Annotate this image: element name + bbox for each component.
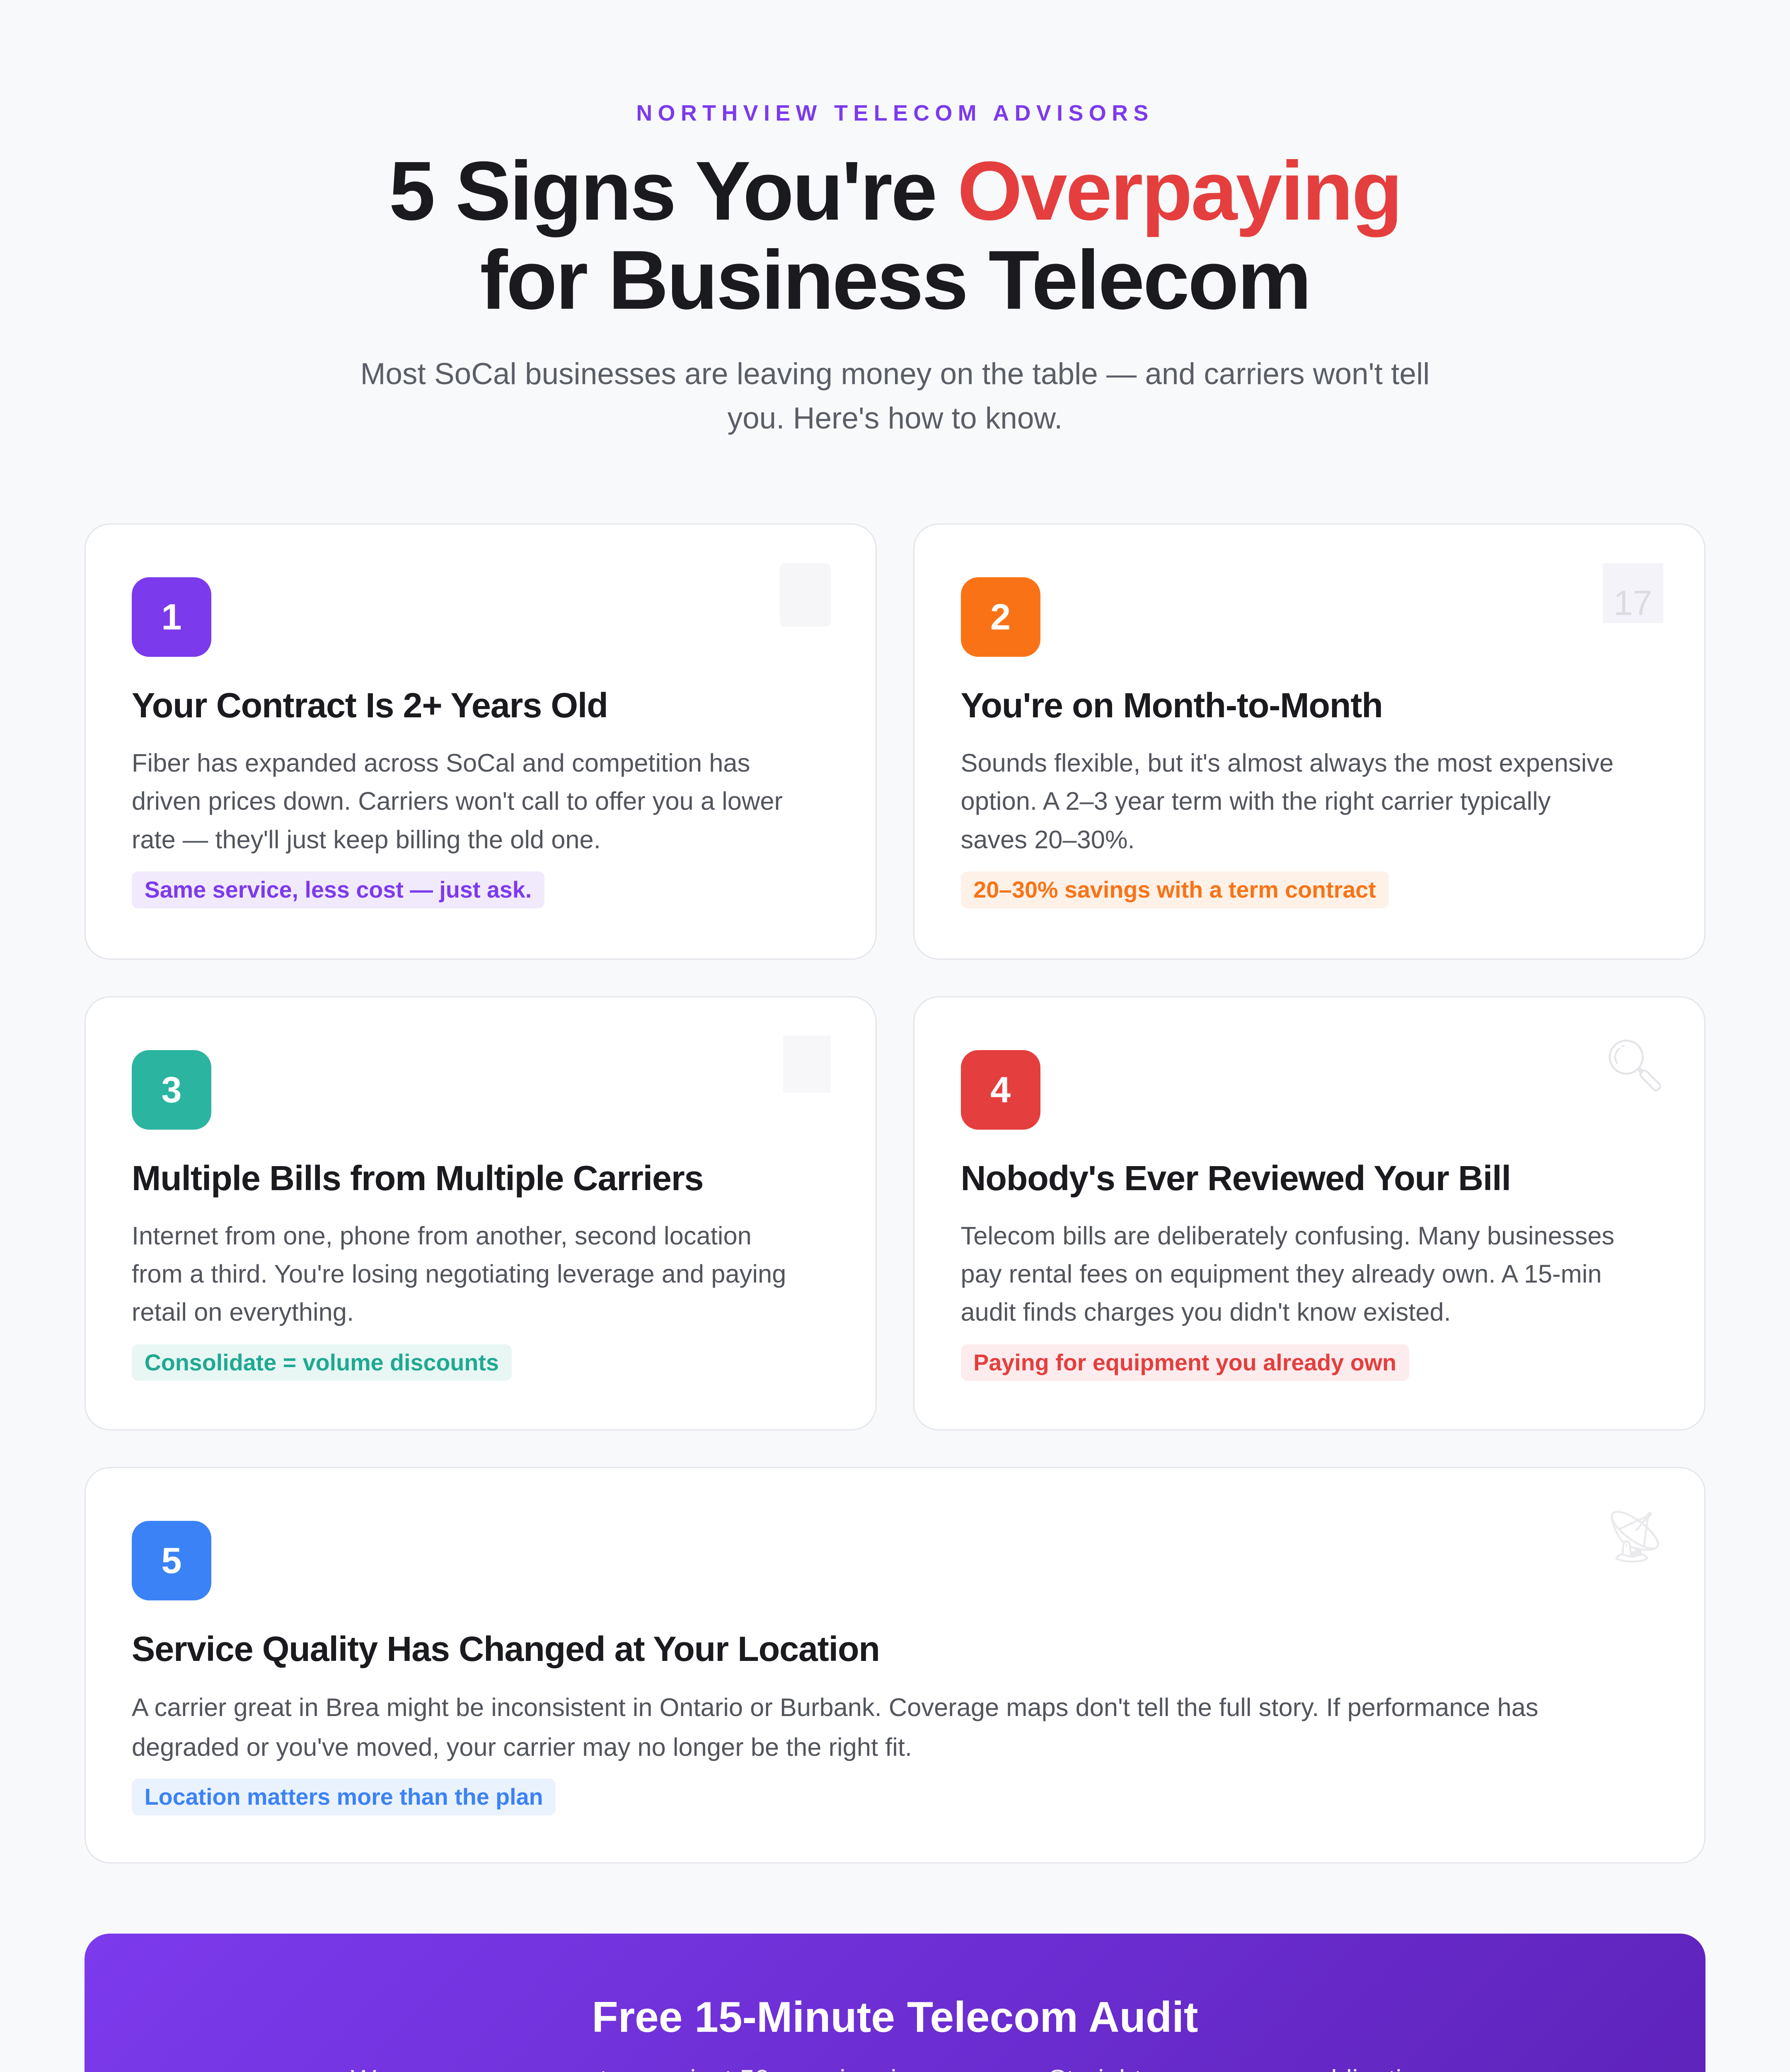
text 5: A carrier great in Brea might be inconsistent in Ontario or Burbank. Coverage maps don't tell the full story. If performance has degraded or you've moved, your carrier may no longer be the right fit.: [132, 1693, 1538, 1762]
icon: document: [780, 563, 831, 627]
heading 4: Nobody's Ever Reviewed Your Bill: [961, 1159, 1511, 1198]
tag 4: Paying for equipment you already own: [973, 1350, 1396, 1375]
panel: sign 4: [913, 996, 1705, 1431]
panel: sign 2: [913, 523, 1705, 960]
CTA panel: [85, 1934, 1705, 2072]
tag 2: 20–30% savings with a term contract: [973, 877, 1376, 903]
icon: satellite dish: 📡︎: [1603, 1508, 1667, 1565]
title: for Business Telecom: [480, 233, 1310, 327]
heading 2: You're on Month-to-Month: [961, 686, 1383, 725]
brand label: NORTHVIEW TELECOM ADVISORS: [636, 101, 1154, 126]
text 2: Sounds flexible, but it's almost always the most expensive option. A 2–3 year term with the right carrier typically saves 20–30%.: [961, 749, 1613, 854]
badge 4: 4: [990, 1069, 1011, 1110]
badge 3: 3: [161, 1069, 181, 1110]
icon: magnifier: 🔍︎: [1603, 1037, 1667, 1094]
text 3: Internet from one, phone from another, second location from a third. You're losing negotiating leverage and paying retail on everything.: [132, 1222, 786, 1326]
badge 1: [132, 577, 211, 657]
panel: sign 5: [85, 1467, 1705, 1864]
badge 5: 5: [161, 1540, 181, 1581]
badge 3: [132, 1050, 211, 1130]
tag 1: Same service, less cost — just ask.: [145, 877, 532, 903]
badge 5: [132, 1521, 211, 1600]
tag 3: Consolidate = volume discounts: [145, 1350, 499, 1375]
icon: receipt: [783, 1036, 831, 1093]
heading 3: Multiple Bills from Multiple Carriers: [132, 1159, 703, 1198]
tag 4: [961, 1344, 1409, 1381]
tag 5: Location matters more than the plan: [145, 1784, 543, 1810]
subtitle: Most SoCal businesses are leaving money on the table — and carriers won't tell you. Here's how to know.: [360, 357, 1430, 435]
panel: sign 1: [85, 523, 877, 960]
title: 5 Signs You're Overpaying: [389, 144, 1401, 237]
tag 2: [961, 871, 1389, 908]
text 1: Fiber has expanded across SoCal and competition has driven prices down. Carriers won't call to offer you a lower rate — they'll just keep billing the old one.: [132, 749, 783, 854]
icon: calendar: 17: [1613, 583, 1652, 622]
heading 5: Service Quality Has Changed at Your Location: [132, 1629, 880, 1668]
title: [0, 146, 1790, 324]
badge 1: 1: [161, 596, 181, 637]
CTA heading: Free 15-Minute Telecom Audit: [592, 1993, 1198, 2041]
tag 1: [132, 871, 544, 908]
tag 5: [132, 1779, 556, 1815]
tag 3: [132, 1344, 512, 1381]
badge 4: [961, 1050, 1040, 1130]
badge 2: 2: [990, 596, 1011, 637]
panel: sign 3: [85, 996, 877, 1431]
icon: calendar: [1603, 563, 1663, 623]
badge 2: [961, 577, 1040, 657]
text 4: Telecom bills are deliberately confusing. Many businesses pay rental fees on equipment they already own. A 15-min audit finds charges you didn't know existed.: [961, 1222, 1614, 1326]
heading 1: Your Contract Is 2+ Years Old: [132, 686, 608, 725]
